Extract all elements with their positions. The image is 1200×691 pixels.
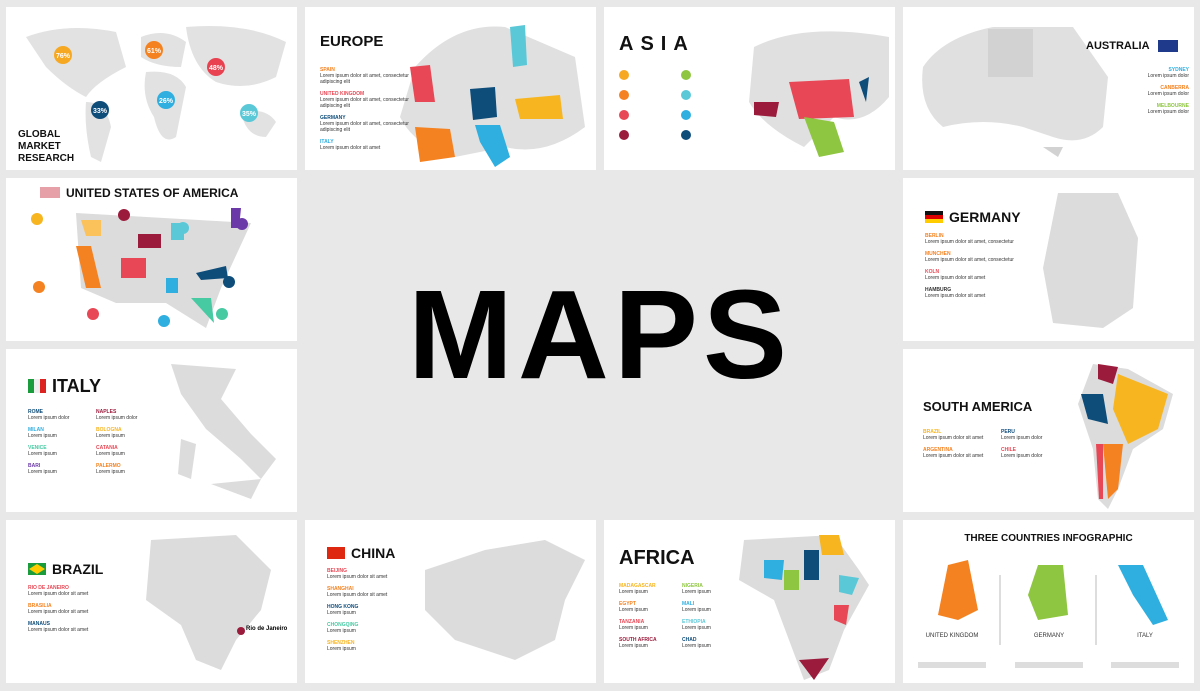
list xyxy=(28,409,70,475)
list: Lorem ipsum xyxy=(327,628,356,634)
list: Lorem ipsum dolor sit amet, consectetur adipiscing elit xyxy=(320,73,409,85)
tile: italy: BOLOGNA xyxy=(96,427,122,433)
heading: BRAZIL xyxy=(52,561,103,577)
heading: ASIA xyxy=(619,33,695,55)
list: Lorem ipsum dolor sit amet, consectetur xyxy=(925,239,1014,245)
tile: africa: Lorem ipsum xyxy=(682,589,711,595)
list: Lorem ipsum dolor sit amet xyxy=(327,592,387,598)
list: Lorem ipsum xyxy=(619,589,648,595)
tile: africa: Lorem ipsum xyxy=(682,607,711,613)
list: Lorem ipsum xyxy=(28,469,57,475)
list: Lorem ipsum dolor sit amet xyxy=(28,609,88,615)
tile: italy: PALERMO xyxy=(96,463,121,469)
tile: italy: Lorem ipsum xyxy=(96,433,125,439)
tile: south america: CHILE xyxy=(1001,447,1016,453)
list: Lorem ipsum dolor sit amet xyxy=(327,574,387,580)
tile: italy: Lorem ipsum xyxy=(96,469,125,475)
list xyxy=(925,233,1014,299)
heading: GLOBAL xyxy=(18,129,60,140)
tile: africa: Lorem ipsum xyxy=(682,643,711,649)
list: Lorem ipsum dolor sit amet, consectetur xyxy=(925,257,1014,263)
list xyxy=(327,568,388,652)
list: Lorem ipsum xyxy=(28,433,57,439)
tile: italy: NAPLES xyxy=(96,409,116,415)
list: SHENZHEN xyxy=(327,640,355,646)
tile: three countries: GERMANY xyxy=(1034,633,1064,639)
list: ITALY xyxy=(320,139,334,145)
tile: world map: 48% xyxy=(209,65,224,72)
list: MADAGASCAR xyxy=(619,583,656,589)
list: KOLN xyxy=(925,269,939,275)
list: Lorem ipsum xyxy=(619,625,648,631)
heading: RESEARCH xyxy=(18,153,74,164)
list: Lorem ipsum xyxy=(619,607,648,613)
list: Lorem ipsum dolor xyxy=(1148,109,1189,115)
list: Lorem ipsum dolor sit amet xyxy=(320,145,380,151)
list: BEIJING xyxy=(327,568,347,574)
list: MELBOURNE xyxy=(1157,103,1189,109)
heading: ITALY xyxy=(52,376,101,396)
tile: brazil xyxy=(6,520,297,683)
tile: brazil: Rio de Janeiro xyxy=(246,626,287,632)
tile: australia xyxy=(903,7,1194,170)
list: MANAUS xyxy=(28,621,50,627)
list: SOUTH AFRICA xyxy=(619,637,657,643)
list: Lorem ipsum xyxy=(28,451,57,457)
list xyxy=(619,583,657,649)
tile: world map: 61% xyxy=(147,48,162,55)
tile: africa: CHAD xyxy=(682,637,696,643)
heading xyxy=(18,129,74,164)
list: Lorem ipsum dolor sit amet xyxy=(923,435,983,441)
heading: AUSTRALIA xyxy=(1086,40,1150,52)
tile: italy: CATANIA xyxy=(96,445,118,451)
list: RIO DE JANEIRO xyxy=(28,585,69,591)
list: Lorem ipsum dolor sit amet, consectetur adipiscing elit xyxy=(320,97,409,109)
pins xyxy=(54,41,258,122)
list: TANZANIA xyxy=(619,619,644,625)
list xyxy=(320,67,409,151)
tile: africa: Lorem ipsum xyxy=(682,625,711,631)
list: BRAZIL xyxy=(923,429,941,435)
tile: africa: MALI xyxy=(682,601,694,607)
tile: south america xyxy=(903,349,1194,512)
list: Lorem ipsum dolor sit amet xyxy=(925,275,985,281)
list: BERLIN xyxy=(925,233,944,239)
tile: italy: Lorem ipsum dolor xyxy=(96,415,137,421)
list: Lorem ipsum dolor xyxy=(1148,91,1189,97)
tile: europe xyxy=(305,7,596,170)
list: SHANGHAI xyxy=(327,586,354,592)
list: SPAIN xyxy=(320,67,335,73)
tile: three countries: ITALY xyxy=(1137,633,1153,639)
heading: THREE COUNTRIES INFOGRAPHIC xyxy=(964,533,1133,544)
tile: germany xyxy=(903,178,1194,341)
list: SYDNEY xyxy=(1168,67,1189,73)
list: ROME xyxy=(28,409,43,415)
list: Lorem ipsum dolor sit amet xyxy=(923,453,983,459)
list: ARGENTINA xyxy=(923,447,953,453)
tile: south america: Lorem ipsum dolor xyxy=(1001,453,1042,459)
list: Lorem ipsum xyxy=(327,646,356,652)
list: VENICE xyxy=(28,445,47,451)
heading: CHINA xyxy=(351,545,395,561)
heading: EUROPE xyxy=(320,33,383,50)
list: CHONGQING xyxy=(327,622,358,628)
list xyxy=(1148,67,1189,115)
tile: africa: ETHIOPIA xyxy=(682,619,706,625)
tile: south america: PERU xyxy=(1001,429,1015,435)
tile: world map: 26% xyxy=(159,98,174,105)
list: Lorem ipsum dolor xyxy=(28,415,69,421)
list: CANBERRA xyxy=(1160,85,1189,91)
tile: africa: NIGERIA xyxy=(682,583,703,589)
tile: china xyxy=(305,520,596,683)
list: BARI xyxy=(28,463,40,469)
tile: three countries: UNITED KINGDOM xyxy=(926,633,978,639)
list: HONG KONG xyxy=(327,604,358,610)
list xyxy=(28,585,88,633)
tile: world map xyxy=(6,7,297,170)
list: EGYPT xyxy=(619,601,636,607)
list: MUNCHEN xyxy=(925,251,951,257)
labels xyxy=(926,632,1153,639)
tile: world map: 76% xyxy=(56,53,71,60)
tile: world map: 33% xyxy=(93,108,108,115)
tile: usa xyxy=(6,178,297,341)
tile: italy: Lorem ipsum xyxy=(96,451,125,457)
list: Lorem ipsum dolor sit amet xyxy=(28,591,88,597)
list: Lorem ipsum xyxy=(619,643,648,649)
heading: SOUTH AMERICA xyxy=(923,399,1032,414)
list: MILAN xyxy=(28,427,44,433)
heading: GERMANY xyxy=(949,209,1021,225)
title: MAPS: MAPS xyxy=(408,264,792,405)
list: UNITED KINGDOM xyxy=(320,91,364,97)
tile: africa xyxy=(604,520,895,683)
list: Lorem ipsum dolor sit amet xyxy=(28,627,88,633)
list xyxy=(923,429,984,459)
tile: south america: Lorem ipsum dolor xyxy=(1001,435,1042,441)
heading: AFRICA xyxy=(619,547,695,569)
list: Lorem ipsum dolor sit amet xyxy=(925,293,985,299)
list: BRASILIA xyxy=(28,603,52,609)
tile: asia xyxy=(604,7,895,170)
tile: three countries xyxy=(903,520,1194,683)
tile: world map: 35% xyxy=(242,111,257,118)
list: Lorem ipsum xyxy=(327,610,356,616)
world map shapes xyxy=(26,26,286,162)
heading: UNITED STATES OF AMERICA xyxy=(66,186,238,200)
tile: italy xyxy=(6,349,297,512)
list: Lorem ipsum dolor sit amet, consectetur adipiscing elit xyxy=(320,121,409,133)
heading: MARKET xyxy=(18,141,61,152)
list: GERMANY xyxy=(320,115,346,121)
list: Lorem ipsum dolor xyxy=(1148,73,1189,79)
list: HAMBURG xyxy=(925,287,951,293)
